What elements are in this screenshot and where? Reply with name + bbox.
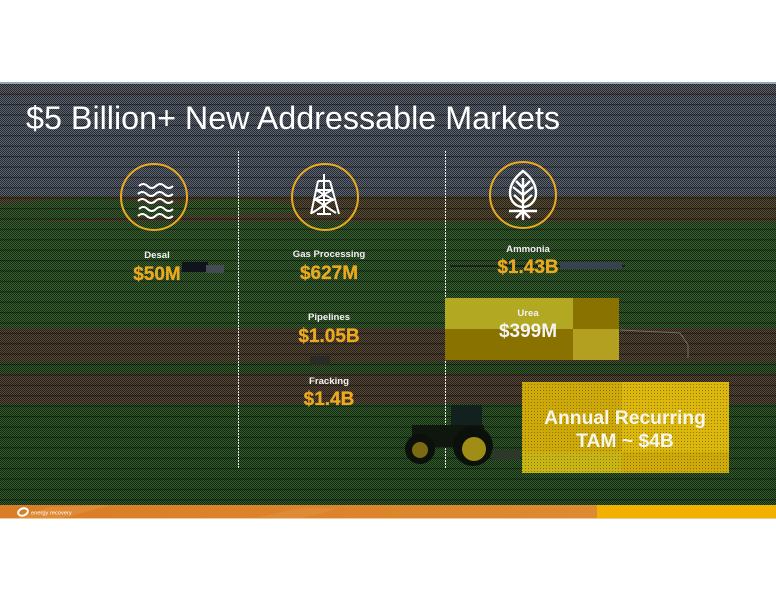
- callout: Urea: $399M: [499, 321, 557, 342]
- label: Pipelines: [298, 312, 360, 347]
- value: Desal: $50M: [133, 264, 181, 285]
- label: Gas Processing: Gas Processing: [293, 249, 365, 260]
- label: Desal: [133, 250, 181, 285]
- callout: Urea: Urea: [517, 308, 539, 319]
- callout: Annual Recurring TAM: [522, 382, 729, 473]
- background photo: farm field: [0, 82, 776, 505]
- footer band: [0, 505, 776, 519]
- label: Pipelines: Pipelines: [308, 312, 350, 323]
- label: Fracking: [304, 376, 354, 410]
- icon: water waves: [121, 164, 187, 230]
- value: Pipelines: $1.05B: [298, 326, 360, 347]
- callout: Annual Recurring TAM: Annual Recurring: [544, 408, 706, 429]
- title: $5 Billion+ New Addressable Markets: [26, 100, 560, 136]
- logo: energy recovery: [17, 507, 72, 517]
- value: Gas Processing: $627M: [300, 263, 358, 284]
- callout: Urea: [445, 298, 619, 360]
- label: Gas Processing: [293, 249, 365, 284]
- distant vehicles on the horizon: [182, 262, 688, 365]
- tractor: [405, 405, 520, 466]
- label: Ammonia: [497, 244, 559, 278]
- icon: derrick tower: [292, 164, 358, 230]
- label: Ammonia: Ammonia: [506, 244, 551, 255]
- logo: energy recovery: energy recovery: [31, 510, 72, 516]
- column divider lines: [238, 151, 446, 469]
- icon: leaf: [490, 162, 556, 228]
- label: Fracking: Fracking: [309, 376, 349, 387]
- value: Ammonia: $1.43B: [497, 257, 559, 278]
- callout: Annual Recurring TAM: TAM ~ $4B: [576, 431, 674, 452]
- value: Fracking: $1.4B: [304, 389, 354, 410]
- label: Desal: Desal: [144, 250, 170, 261]
